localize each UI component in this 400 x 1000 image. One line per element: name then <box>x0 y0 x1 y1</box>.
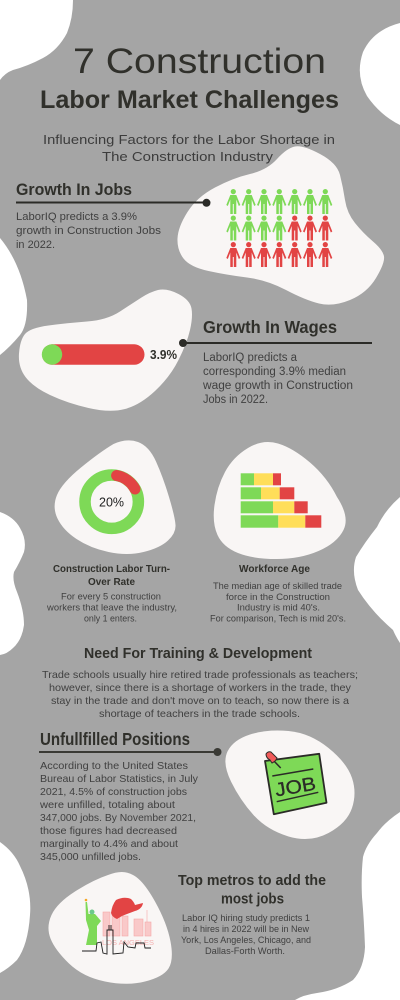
icon: city collage <box>82 898 154 954</box>
heading: training and development: Need For Training & Development <box>84 645 312 662</box>
icon: pinned job note: JOB <box>274 774 318 801</box>
icon: pinned job note <box>265 752 326 814</box>
chicago skyline outline <box>82 925 151 954</box>
text: workforce age: force in the Construction <box>226 592 330 603</box>
heading: growth in wages: Growth In Wages <box>203 317 337 337</box>
blob: city icon backdrop <box>48 872 172 984</box>
text: turnover rate: workers that leave the industry, <box>46 602 177 614</box>
text: unfulfilled positions: 347,000 jobs. By November 2021, <box>40 812 196 824</box>
text: growth in wages: Jobs in 2022. <box>203 394 268 406</box>
text: turnover rate <box>46 592 177 624</box>
text: workforce age: The median age of skilled trade <box>213 581 342 592</box>
title: Labor Market Challenges <box>40 86 339 114</box>
text: unfulfilled positions: marginally to 4.4% and about <box>40 838 178 850</box>
heading: unfulfilled positions: Unfullfilled Positions <box>40 729 190 749</box>
text: growth in jobs: LaborIQ predicts a 3.9% <box>16 211 137 223</box>
text: growth in jobs: growth in Construction Jobs <box>16 225 162 237</box>
subtitle: The Construction Industry <box>102 149 274 164</box>
heading: turnover rate: Over Rate <box>88 576 135 588</box>
text: growth in wages: LaborIQ predicts a <box>203 352 298 364</box>
text: workforce age: For comparison, Tech is mid 20's. <box>210 614 346 624</box>
text: top metros: York, Los Angeles, Chicago, and <box>181 935 311 946</box>
subtitle: Influencing Factors for the Labor Shortage in <box>43 132 335 147</box>
text: training and development <box>42 669 358 720</box>
donut chart 20%: 20% <box>99 494 124 510</box>
panel: growth in wages <box>19 290 372 411</box>
blob: stacked bars backdrop <box>214 442 346 559</box>
text: unfulfilled positions: 345,000 unfilled jobs. <box>40 851 141 863</box>
text: growth in wages <box>202 352 353 406</box>
text: top metros <box>181 913 311 957</box>
connector line with dot <box>179 339 372 347</box>
progress bar 3.9% <box>42 344 177 365</box>
panel: growth in jobs <box>16 146 384 305</box>
text: unfulfilled positions <box>39 760 199 863</box>
subtitle <box>43 132 335 164</box>
text: turnover rate: only 1 enters. <box>84 614 137 624</box>
panel: turnover rate <box>46 440 177 624</box>
text: growth in wages: corresponding 3.9% median <box>203 366 346 378</box>
text: top metros: Labor IQ hiring study predicts 1 <box>182 913 310 924</box>
connector line with dot <box>39 748 222 756</box>
text: growth in jobs: in 2022. <box>16 239 55 251</box>
text: turnover rate: For every 5 construction <box>61 592 161 602</box>
panel: workforce age <box>210 442 346 624</box>
text: training and development: Trade schools usually hire retired trade professionals as teachers; <box>42 669 358 681</box>
blob: jobs pictogram backdrop <box>177 146 384 305</box>
progress bar 3.9%: 3.9% <box>150 348 177 362</box>
los angeles skyline: LOS ANGELES <box>102 938 154 947</box>
blob: job note backdrop <box>225 730 354 839</box>
cowboy hat <box>111 898 143 919</box>
panel: top metros <box>48 872 326 984</box>
heading: growth in jobs: Growth In Jobs <box>16 180 132 199</box>
statue of liberty <box>85 899 101 945</box>
text: unfulfilled positions: According to the United States <box>40 760 188 772</box>
donut chart 20% <box>85 475 138 528</box>
text: top metros: Dallas-Forth Worth. <box>205 946 285 957</box>
blob: wage bar backdrop <box>19 290 192 411</box>
heading: turnover rate: Construction Labor Turn- <box>53 563 170 575</box>
text: workforce age: Industry is mid 40's. <box>237 603 320 614</box>
text: top metros: in 4 hires in 2022 will be in New <box>183 924 309 935</box>
text: workforce age <box>210 581 346 624</box>
title <box>40 42 339 114</box>
text: unfulfilled positions: those figures had decreased <box>40 825 177 837</box>
title: 7 Construction <box>73 42 326 81</box>
blob: donut backdrop <box>55 440 176 554</box>
text: training and development: stay in the trade and don't move on to teach, so now there is a <box>51 695 349 707</box>
text: unfulfilled positions: Bureau of Labor Statistics, in July <box>40 773 199 785</box>
connector line with dot <box>16 199 210 207</box>
text: unfulfilled positions: were unfilled, totaling about <box>39 799 175 811</box>
heading: turnover rate <box>53 563 170 588</box>
text: growth in wages: wage growth in Construction <box>202 380 353 392</box>
heading: workforce age: Workforce Age <box>239 563 310 575</box>
panel: training and development <box>42 645 358 720</box>
heading: top metros: most jobs <box>221 890 284 908</box>
stacked bar chart <box>241 473 321 528</box>
heading: top metros <box>178 872 326 908</box>
text: unfulfilled positions: 2021, 4.5% of construction jobs <box>40 786 187 798</box>
text: training and development: shortage of teachers in the trade schools. <box>99 708 300 720</box>
text: growth in jobs <box>16 211 162 251</box>
heading: top metros: Top metros to add the <box>178 872 326 889</box>
panel: unfulfilled positions <box>39 729 354 863</box>
text: training and development: however, since there is a shortage of workers in the trade, they <box>49 682 352 694</box>
pictogram: workers green and red <box>226 189 332 267</box>
